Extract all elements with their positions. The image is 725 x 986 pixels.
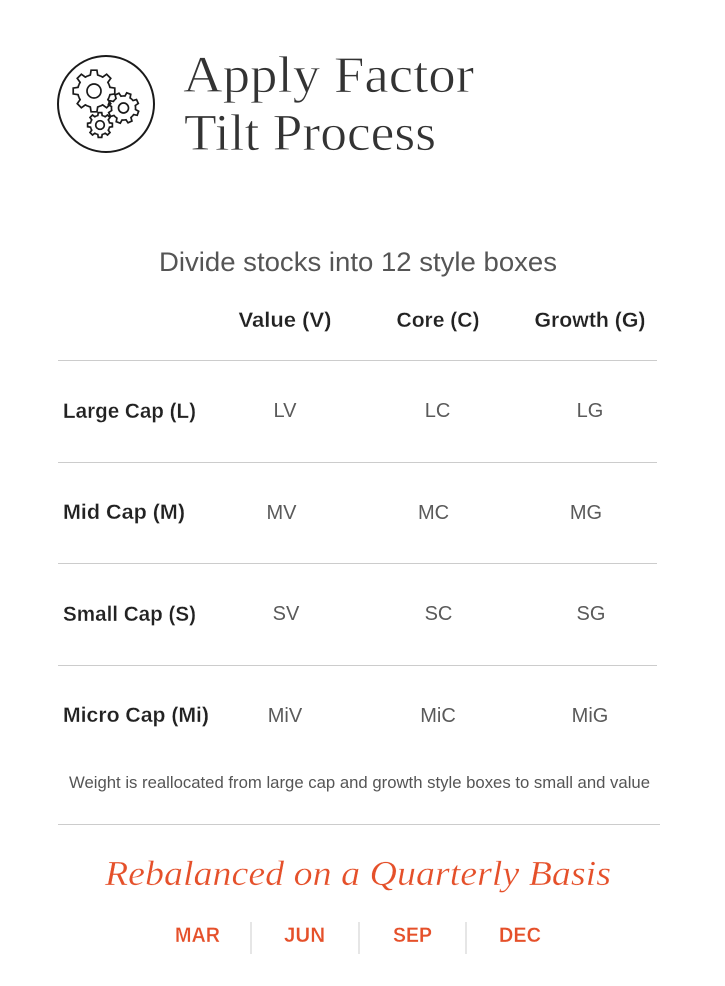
style box table — [58, 309, 657, 727]
rebalance months: DEC — [499, 924, 541, 947]
rebalancing heading: Rebalanced on a Quarterly Basis — [104, 854, 611, 893]
row: micro cap: MiC — [420, 705, 456, 727]
subtitle: Divide stocks into 12 style boxes — [159, 247, 557, 277]
rebalance months: SEP — [393, 924, 432, 947]
rebalance months: MAR — [175, 924, 220, 947]
row: mid cap: MV — [266, 502, 297, 524]
row: small cap: SG — [577, 603, 605, 625]
row: large cap: LG — [577, 400, 603, 422]
column headers — [238, 309, 646, 332]
title — [183, 47, 474, 162]
row: micro cap: MiG — [572, 705, 608, 727]
title: Tilt Process — [184, 105, 436, 162]
row: small cap: SV — [273, 603, 300, 625]
icon: gears in circle — [58, 56, 154, 152]
row: micro cap: MiV — [268, 705, 303, 727]
row: mid cap: MG — [570, 502, 602, 524]
row: large cap: LV — [274, 400, 297, 422]
row: large cap: Large Cap (L) — [63, 400, 196, 423]
row: mid cap — [63, 501, 602, 524]
column headers: Growth (G) — [534, 309, 646, 332]
column headers: Core (C) — [396, 309, 480, 332]
row: small cap: Small Cap (S) — [63, 603, 196, 626]
row: large cap — [63, 400, 603, 423]
rebalance months: JUN — [284, 924, 325, 947]
row: small cap: SC — [425, 603, 452, 625]
row: mid cap: Mid Cap (M) — [63, 501, 185, 524]
title: Apply Factor — [183, 47, 474, 104]
row: micro cap: Micro Cap (Mi) — [63, 704, 209, 727]
row: large cap: LC — [425, 400, 450, 422]
row: mid cap: MC — [418, 502, 449, 524]
rebalance months — [175, 922, 541, 954]
column headers: Value (V) — [238, 309, 332, 332]
footnote: Weight is reallocated from large cap and growth style boxes to small and value — [69, 774, 650, 792]
row: micro cap — [63, 704, 608, 727]
row: small cap — [63, 603, 605, 626]
